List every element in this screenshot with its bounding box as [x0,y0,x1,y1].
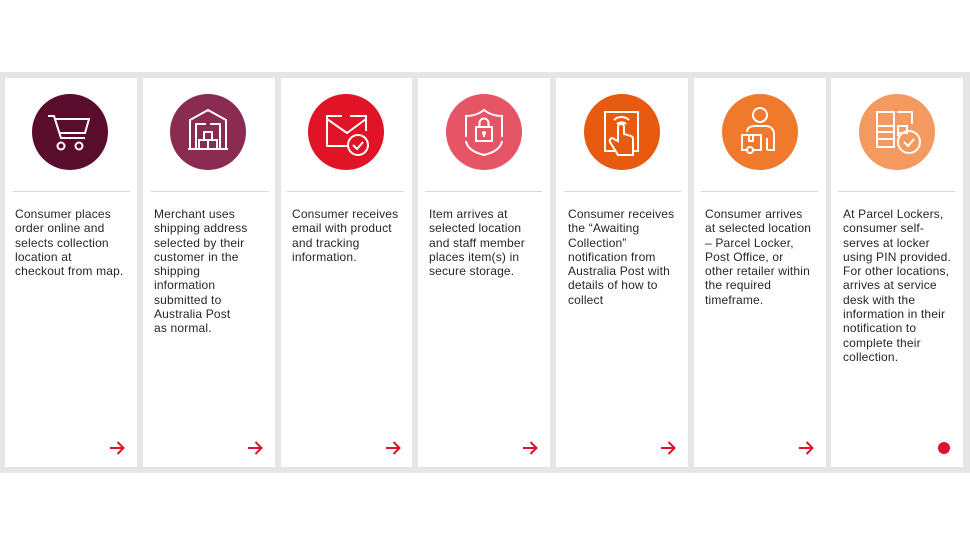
arrow [110,441,125,455]
text: step 6 description: other retailer within [705,264,810,278]
text: step 2 description: shipping address [154,221,247,235]
arrow [386,441,401,455]
arrow [523,441,538,455]
panel: step 2 [143,78,275,467]
text: step 6 description: Post Office, or [705,250,783,264]
panel: step 5 [556,78,688,467]
icon: hand tapping screen [584,94,660,170]
text: step 7 description [843,207,951,364]
arrow [248,441,263,455]
icon: person with parcel [722,94,798,170]
text: step 2 description: information [154,278,215,292]
text: step 3 description: Consumer receives [292,207,398,221]
text: step 7 description: information in their [843,307,945,321]
text: step 6 description: the required [705,278,771,292]
icon: shopping cart [32,94,108,170]
text: step 5 description [568,207,674,307]
text: step 5 description: notification from [568,250,656,264]
text: step 2 description [154,207,247,335]
text: step 7 description: serves at locker [843,236,930,250]
text: step 2 description: as normal. [154,321,212,335]
text: step 4 description: secure storage. [429,264,514,278]
text: step 3 description [292,207,398,264]
text: step 3 description: information. [292,250,357,264]
text: step 7 description: using PIN provided. [843,250,951,264]
icon: parcel lockers with check [859,94,935,170]
text: step 5 description: the “Awaiting [568,221,639,235]
text: step 5 description: Consumer receives [568,207,674,221]
text: step 3 description: email with product [292,221,392,235]
text: step 2 description: customer in the [154,250,239,264]
text: step 1 description: selects collection [15,236,109,250]
text: step 2 description: shipping [154,264,200,278]
panel: step 4 [418,78,550,467]
icon: shield with padlock [446,94,522,170]
text: step 7 description: For other locations, [843,264,949,278]
text: step 5 description: Australia Post with [568,264,670,278]
text: step 5 description: collect [568,293,603,307]
text: step 6 description: Consumer arrives [705,207,802,221]
text: step 7 description: At Parcel Lockers, [843,207,943,221]
text: step 3 description: and tracking [292,236,359,250]
panel: step 3 [281,78,412,467]
text: step 4 description: places item(s) in [429,250,519,264]
arrow [799,441,814,455]
text: step 7 description: notification to [843,321,916,335]
text: step 6 description: timeframe. [705,293,763,307]
text: step 5 description: Collection” [568,236,627,250]
text: step 7 description: collection. [843,350,898,364]
text: step 2 description: selected by their [154,236,244,250]
panel: step 1 [5,78,137,467]
text: step 4 description: Item arrives at [429,207,508,221]
text: step 7 description: arrives at service [843,278,937,292]
text: step 2 description: submitted to [154,293,221,307]
text: step 4 description: selected location [429,221,521,235]
arrow [661,441,676,455]
text: step 2 description: Australia Post [154,307,230,321]
icon: warehouse [170,94,246,170]
panel: step 6 [694,78,826,467]
text: step 1 description: checkout from map. [15,264,123,278]
text: step 2 description: Merchant uses [154,207,235,221]
text: step 5 description: details of how to [568,278,658,292]
icon: email with check [308,94,384,170]
text: step 7 description: desk with the [843,293,915,307]
end dot [938,442,950,454]
background band [0,72,970,473]
text: step 4 description [429,207,525,278]
text: step 1 description: Consumer places [15,207,111,221]
text: step 4 description: and staff member [429,236,525,250]
text: step 1 description: order online and [15,221,104,235]
text: step 7 description: complete their [843,336,921,350]
panel: step 7 [831,78,963,467]
text: step 6 description: at selected location [705,221,811,235]
text: step 6 description: – Parcel Locker, [705,236,794,250]
text: step 7 description: consumer self- [843,221,924,235]
text: step 6 description [705,207,811,307]
text: step 1 description: location at [15,250,72,264]
text: step 1 description [15,207,123,278]
